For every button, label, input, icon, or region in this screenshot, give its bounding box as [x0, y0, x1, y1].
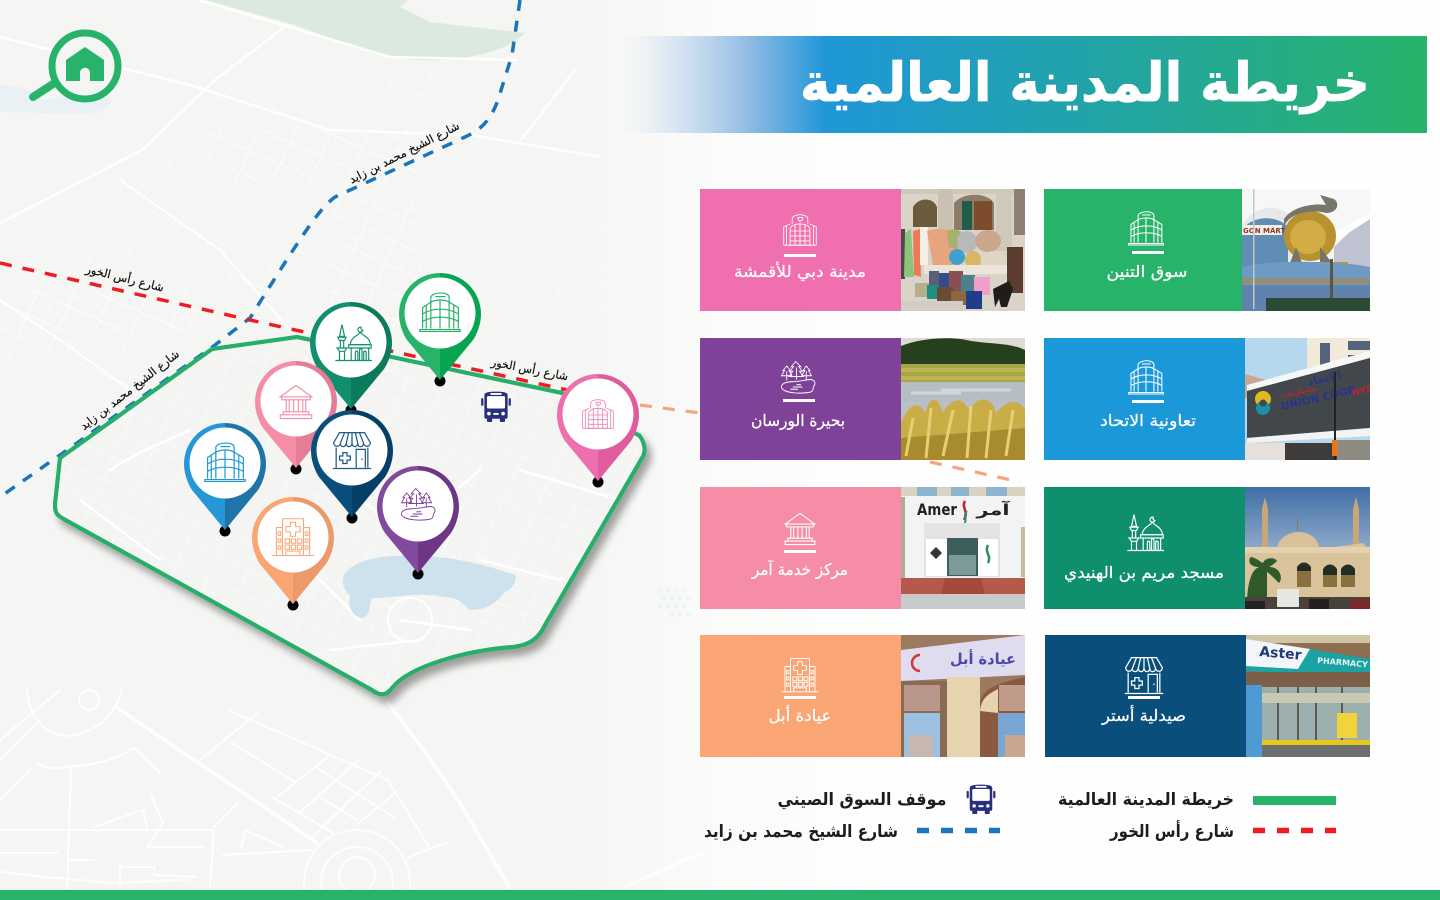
photo: aster — [1246, 635, 1370, 757]
photo: aster: PHARMACY — [1317, 656, 1368, 669]
road label: Ras Al Khor east: شارع رأس الخور — [489, 354, 570, 384]
photo: union coop — [1245, 338, 1374, 460]
logo — [33, 33, 118, 99]
card: Dubai textile city — [700, 189, 1025, 311]
road label: Sheikh Mohammed north: شارع الشيخ محمد بن زايد — [347, 119, 462, 187]
title banner — [620, 36, 1427, 133]
icon — [784, 215, 816, 245]
photo: union coop: مستلزمات — [1280, 384, 1317, 400]
card: Al Warsan lake — [700, 338, 1025, 460]
divider — [784, 550, 816, 553]
icon — [785, 513, 815, 545]
divider — [784, 696, 816, 699]
label: سوق التنين — [1106, 262, 1188, 282]
icon: bus on map — [481, 392, 511, 422]
legend: Ras Al Khor road: شارع رأس الخور — [1109, 820, 1234, 842]
icon — [781, 659, 819, 692]
pin: Warsan lake — [377, 466, 459, 580]
label: بحيرة الورسان — [751, 411, 845, 431]
legend: international city map — [1058, 790, 1336, 810]
pin: Aster pharmacy — [311, 410, 393, 524]
photo: amer: آمر — [975, 501, 1011, 519]
legend: Sheikh Mohammed road: شارع الشيخ محمد بن زايد — [704, 822, 898, 842]
divider — [1132, 251, 1164, 254]
photo: mosque — [1245, 487, 1370, 609]
pin: Mariam mosque — [310, 302, 392, 416]
icon — [1129, 212, 1163, 245]
photo: union coop: HYP — [1351, 384, 1374, 399]
photo: lake — [901, 338, 1025, 460]
road label: Sheikh Mohammed west: شارع الشيخ محمد بن زايد — [77, 347, 183, 434]
photo: dragon mart — [1242, 189, 1370, 311]
card: Union Coop — [1044, 338, 1374, 460]
legend: Chinese market bus stop: موقف السوق الصيني — [778, 790, 946, 810]
legend: international city map: خريطة المدينة العالمية — [1058, 790, 1234, 810]
divider — [783, 399, 815, 402]
photo: textile market — [901, 189, 1025, 311]
road: Sheikh Mohammed bin Zayed — [0, 0, 520, 497]
label: تعاونية الاتحاد — [1100, 411, 1196, 431]
label: صيدلية أستر — [1101, 705, 1186, 726]
card: Amer service centre — [700, 487, 1025, 609]
label: عيادة أبل — [768, 705, 832, 725]
photo: clinic — [901, 635, 1025, 757]
photo: amer: Amer — [917, 500, 957, 519]
road label: Ras Al Khor west: شارع رأس الخور — [83, 260, 166, 296]
divider — [784, 254, 816, 257]
card: Aster pharmacy — [1045, 635, 1370, 757]
divider — [1128, 696, 1160, 699]
label: مركز خدمة آمر — [751, 560, 848, 580]
photo: dragon mart: GON MART — [1243, 227, 1285, 235]
icon — [1129, 361, 1163, 394]
lake — [343, 556, 516, 618]
label: مدينة دبي للأقمشة — [734, 261, 866, 282]
card: Mariam mosque — [1044, 487, 1370, 609]
card: Dragon Mart — [1044, 189, 1370, 311]
title: خريطة المدينة العالمية — [800, 51, 1370, 114]
label: مسجد مريم بن الهنيدي — [1064, 563, 1224, 583]
icon — [1127, 515, 1164, 550]
photo: clinic: عيادة أبل — [950, 649, 1016, 668]
pin: Abel clinic — [252, 497, 334, 610]
icon — [1125, 658, 1163, 694]
photo: amer — [901, 487, 1025, 609]
pin: Dragon Mart — [399, 273, 481, 386]
road: Ras Al Khor — [0, 263, 1020, 482]
divider — [1132, 400, 1164, 403]
map: right side fade — [560, 0, 1440, 900]
pin: Union Coop — [184, 423, 266, 536]
photo: union coop: الاتحاد — [1306, 368, 1342, 389]
footer bar — [0, 890, 1440, 900]
pin: Amer centre — [255, 361, 337, 474]
photo: aster: Aster — [1259, 644, 1302, 664]
pin: Textile city — [557, 374, 639, 488]
legend: Chinese market bus stop — [778, 785, 995, 814]
district boundary — [55, 337, 645, 700]
icon — [781, 362, 815, 393]
card: Abel clinic — [700, 635, 1025, 757]
photo: union coop: UNION COOP — [1280, 384, 1357, 413]
